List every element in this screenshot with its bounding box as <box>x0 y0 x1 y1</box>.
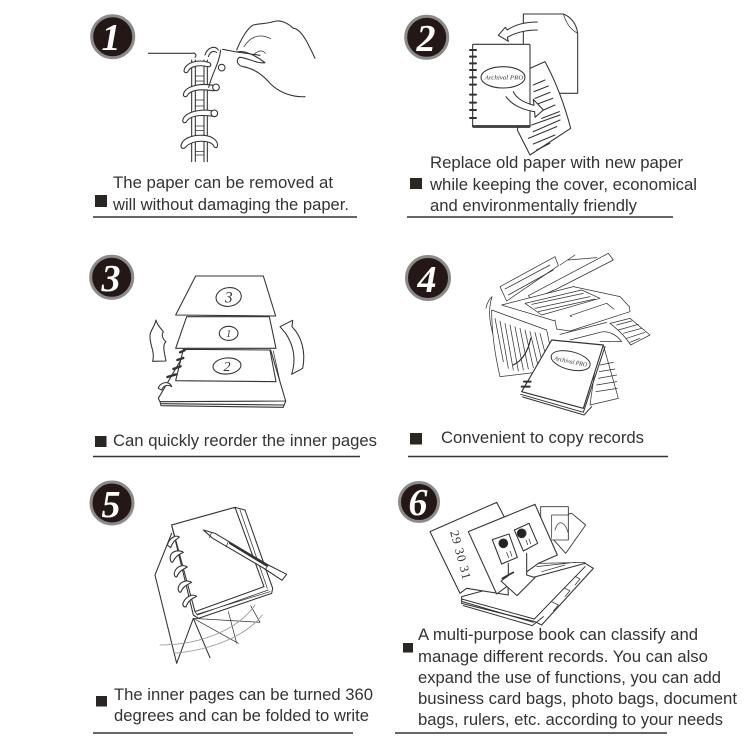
badge: number 6 <box>400 482 438 524</box>
badge: number 1: 1 <box>102 17 120 59</box>
badge: number 3: 3 <box>100 258 120 300</box>
badge: number 2 <box>406 16 448 60</box>
caption: business card bags, photo bags, document <box>418 690 737 708</box>
illustration: hand removing paper from rings <box>148 21 315 162</box>
bullet square <box>403 643 413 652</box>
caption: while keeping the cover, economical <box>429 176 697 194</box>
badge: number 3 <box>91 256 133 300</box>
bullet square <box>95 195 107 207</box>
panel: feature 4 copy records <box>406 253 668 456</box>
panel: feature 3 reorder pages <box>91 256 377 456</box>
bullet square <box>410 433 422 444</box>
caption: The paper can be removed at <box>113 174 333 192</box>
badge: number 1 <box>92 16 134 59</box>
bullet square <box>95 436 106 447</box>
caption: manage different records. You can also <box>418 648 708 666</box>
illustration: stacked numbered pages: 3 <box>224 290 233 307</box>
badge: number 4 <box>406 256 450 301</box>
panel: feature 5 pages turn 360 degrees <box>91 482 373 733</box>
caption: bags, rulers, etc. according to your needs <box>418 711 723 729</box>
caption: A multi-purpose book can classify and <box>418 626 698 644</box>
badge: number 5 <box>91 482 133 526</box>
panel: feature 1 removable paper <box>92 16 357 217</box>
caption: degrees and can be folded to write <box>114 707 369 725</box>
badge: number 4: 4 <box>416 259 436 301</box>
bullet square <box>410 178 422 189</box>
caption: Convenient to copy records <box>441 429 644 447</box>
badge: number 2: 2 <box>416 18 436 60</box>
badge: number 5: 5 <box>102 484 120 526</box>
illustration: stacked numbered pages <box>150 276 304 407</box>
caption: and environmentally friendly <box>430 197 638 215</box>
caption: will without damaging the paper. <box>112 196 349 214</box>
caption: expand the use of functions, you can add <box>418 669 721 687</box>
illustration: stacked numbered pages: 1 <box>226 329 231 340</box>
panel: feature 6 multi-purpose book <box>395 482 737 733</box>
illustration: open notebook with pen <box>155 507 287 663</box>
illustration: notebook with pages being swapped <box>470 14 578 155</box>
illustration: book with inserts and photos <box>430 502 593 626</box>
illustration: stacked numbered pages: 2 <box>223 360 230 375</box>
illustration: notebook with pages being swapped: Archival PRO <box>484 74 524 81</box>
badge: number 6: 6 <box>408 482 428 524</box>
panel: feature 2 replace paper <box>406 14 697 217</box>
caption: Can quickly reorder the inner pages <box>113 432 377 450</box>
caption: The inner pages can be turned 360 <box>114 686 373 704</box>
illustration: book with inserts and photos: 29 30 31 <box>447 529 474 581</box>
illustration: copier with notebook <box>486 253 650 415</box>
bullet square <box>96 696 107 706</box>
caption: Replace old paper with new paper <box>430 154 684 172</box>
illustration: copier with notebook: Archival PRO <box>553 355 588 369</box>
